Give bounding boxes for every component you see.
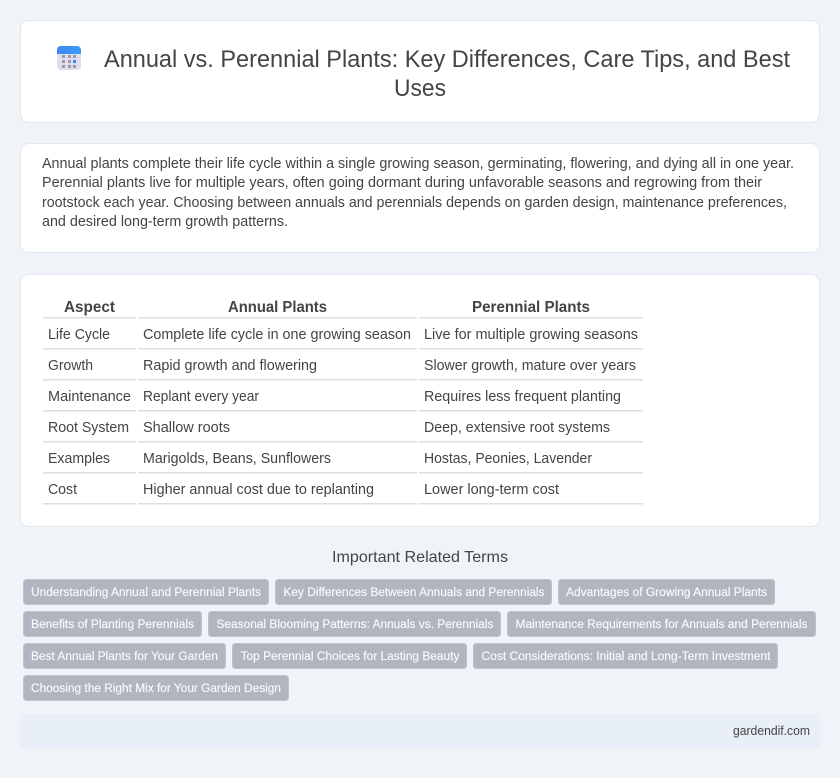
- tag: Maintenance Requirements for Annuals and Perennials: [516, 617, 808, 631]
- related term tags: [24, 580, 816, 700]
- intro text: and desired long-term growth patterns.: [42, 214, 288, 230]
- tag: Choosing the Right Mix for Your Garden Design: [31, 681, 281, 695]
- tag: [24, 644, 226, 668]
- row: growth: Rapid growth and flowering: [143, 358, 317, 374]
- row: maintenance: [48, 389, 621, 405]
- row: growth: Growth: [48, 358, 93, 374]
- title: Uses: [394, 75, 446, 102]
- intro text: Perennial plants live for multiple years, often going dormant during unfavorable seasons and regrowing from their: [42, 175, 762, 191]
- tag: Seasonal Blooming Patterns: Annuals vs. Perennials: [216, 617, 494, 631]
- tag: [24, 676, 288, 700]
- tag: [24, 580, 268, 604]
- footer source text: gardendif.com: [733, 724, 810, 738]
- tag: [232, 644, 466, 668]
- footer bar: [20, 714, 820, 748]
- row: root system: Deep, extensive root systems: [424, 420, 610, 436]
- row: cost: [48, 482, 559, 498]
- title: [104, 46, 790, 102]
- row: examples: [48, 451, 592, 467]
- table header: [64, 299, 590, 316]
- panel: comparison table: [20, 274, 820, 526]
- tag: Advantages of Growing Annual Plants: [566, 585, 767, 599]
- tag: [24, 612, 202, 636]
- row: examples: Marigolds, Beans, Sunflowers: [143, 451, 331, 467]
- heading: related terms: Important Related Terms: [332, 549, 508, 566]
- row: cost: Higher annual cost due to replanting: [143, 482, 374, 498]
- row: maintenance: Replant every year: [143, 389, 259, 405]
- row: root system: Root System: [48, 420, 129, 436]
- tag: [508, 612, 816, 636]
- tag: Key Differences Between Annuals and Perennials: [284, 585, 544, 599]
- row: growth: Slower growth, mature over years: [424, 358, 636, 374]
- panel: introduction: [20, 144, 820, 252]
- row: growth: [48, 358, 636, 374]
- tag: [276, 580, 552, 604]
- icon: calendar: [57, 46, 81, 70]
- row: root system: Shallow roots: [143, 420, 230, 436]
- table header: Perennial Plants: [472, 299, 590, 316]
- tag: Cost Considerations: Initial and Long-Term Investment: [482, 649, 771, 663]
- row: maintenance: Requires less frequent planting: [424, 389, 621, 405]
- row: examples: Examples: [48, 451, 110, 467]
- table header: Annual Plants: [228, 299, 327, 316]
- tag: [558, 580, 774, 604]
- tag: Top Perennial Choices for Lasting Beauty: [240, 649, 460, 663]
- row: life cycle: Live for multiple growing seasons: [424, 327, 638, 343]
- row: cost: Cost: [48, 482, 77, 498]
- tag: Benefits of Planting Perennials: [31, 617, 194, 631]
- intro text: rootstock each year. Choosing between annuals and perennials depends on garden design, maintenance preferences,: [42, 195, 787, 211]
- tag: [474, 644, 778, 668]
- tag: [208, 612, 500, 636]
- title: Annual vs. Perennial Plants: Key Differences, Care Tips, and Best: [104, 46, 790, 73]
- intro text: [42, 156, 794, 230]
- row: root system: [48, 420, 610, 436]
- table header: Aspect: [64, 299, 116, 316]
- panel: title header: [20, 20, 820, 122]
- row: life cycle: Complete life cycle in one growing season: [143, 327, 411, 343]
- row: cost: Lower long-term cost: [424, 482, 559, 498]
- row: life cycle: [48, 327, 638, 343]
- tag: Best Annual Plants for Your Garden: [31, 649, 218, 663]
- intro text: Annual plants complete their life cycle within a single growing season, germinating, flowering, and dying all in one year.: [42, 156, 794, 172]
- row: maintenance: Maintenance: [48, 389, 131, 405]
- row: examples: Hostas, Peonies, Lavender: [424, 451, 592, 467]
- tag: Understanding Annual and Perennial Plants: [31, 585, 261, 599]
- row: life cycle: Life Cycle: [48, 327, 110, 343]
